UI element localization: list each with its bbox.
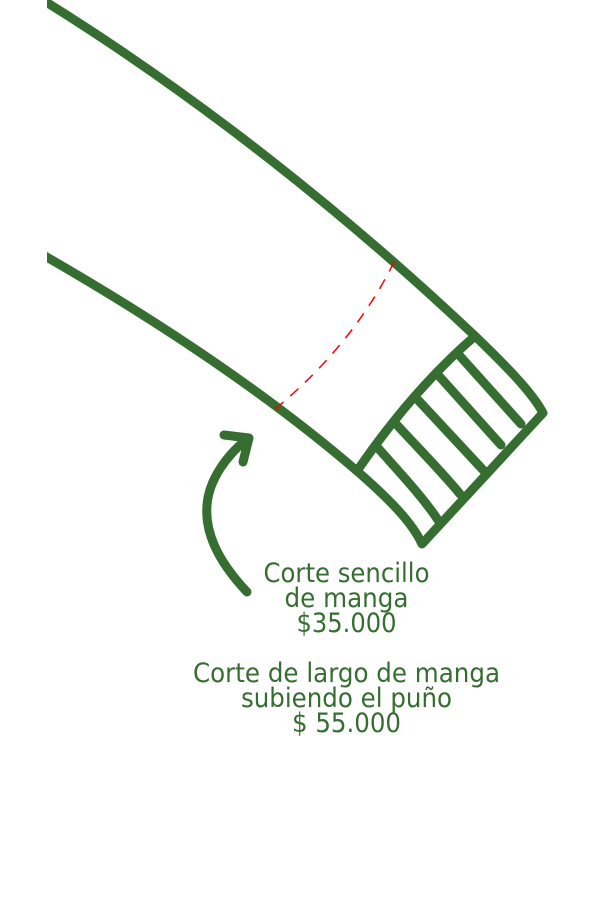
price text: sleeve length cut	[193, 658, 500, 739]
price text: simple sleeve cut: de manga	[284, 583, 408, 614]
price text: sleeve length cut: Corte de largo de manga	[193, 658, 500, 689]
sleeve outline	[38, 0, 475, 544]
price text: sleeve length cut: subiendo el puño	[241, 683, 452, 714]
price text: simple sleeve cut: $35.000	[296, 608, 396, 639]
price text: sleeve length cut: $ 55.000	[292, 708, 401, 739]
curved arrow pointing to cut line	[207, 435, 249, 592]
infographic canvas	[47, 0, 548, 736]
sleeve cuff with ribbing	[357, 336, 543, 544]
price text: simple sleeve cut	[264, 558, 430, 639]
price text: simple sleeve cut: Corte sencillo	[264, 558, 430, 589]
red dashed cut line	[275, 258, 396, 409]
